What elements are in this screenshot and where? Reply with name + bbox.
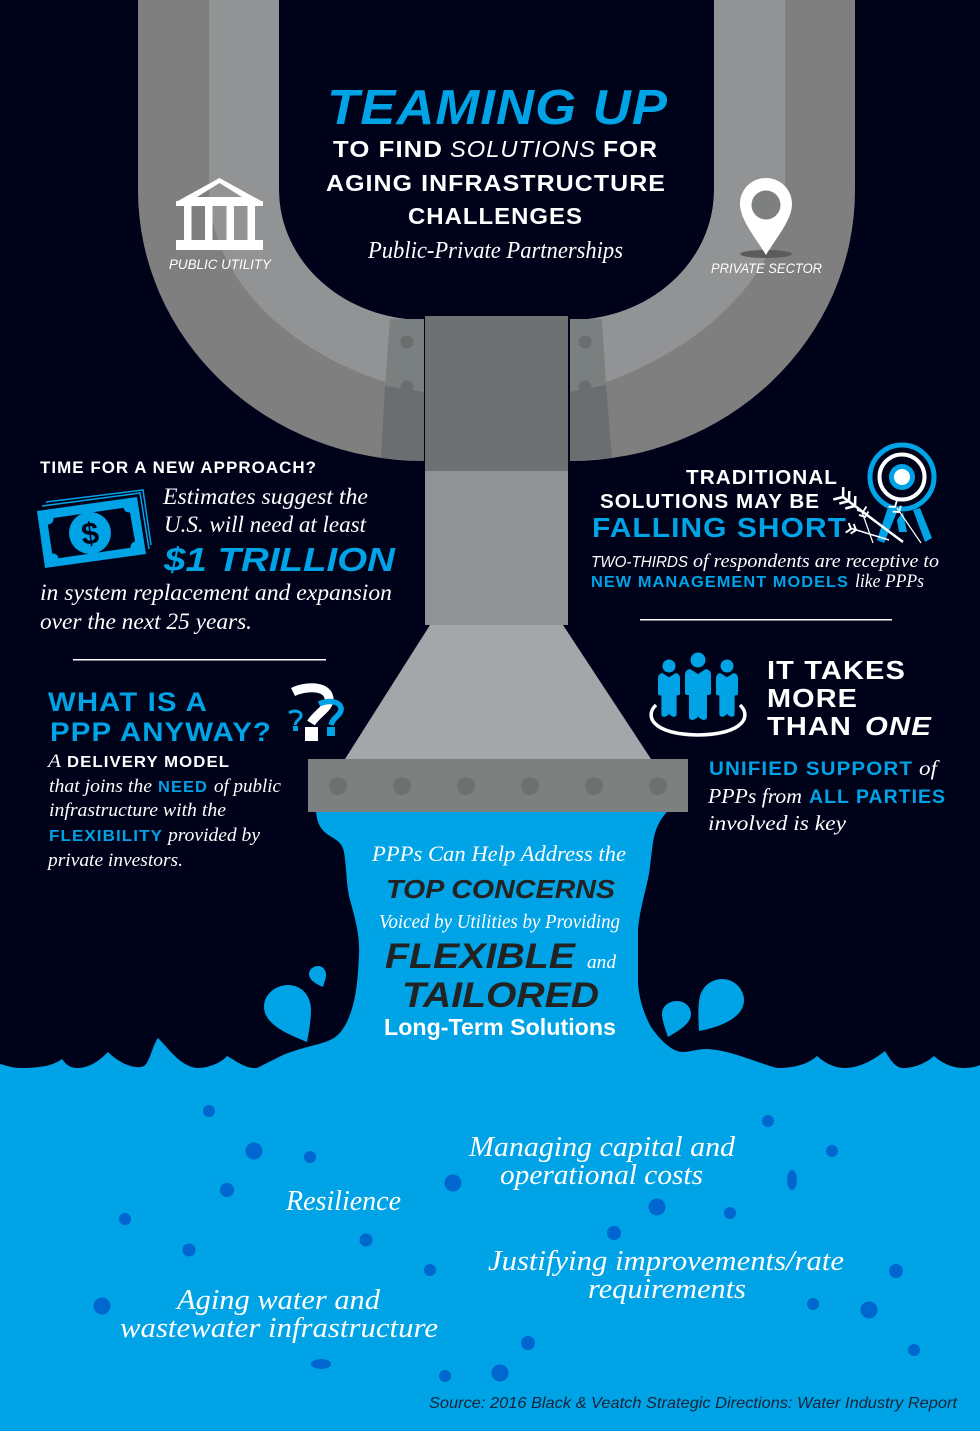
heading: it takes more than one: ONE: [865, 711, 932, 741]
right pipe collar: [570, 319, 612, 461]
body text: two-thirds of respondents: of respondents are receptive to: [693, 552, 939, 572]
icon: three people in a ring: [651, 652, 745, 735]
heading: it takes more than one: [767, 655, 932, 741]
heading: time for a new approach: TIME FOR A NEW APPROACH?: [40, 459, 317, 477]
junction lower section: [425, 471, 568, 625]
icon: question marks: [289, 688, 341, 741]
callout: top concerns on the water stream: Voiced by Utilities by Providing: [379, 912, 620, 933]
heading: what is a ppp anyway: WHAT IS A: [48, 687, 208, 717]
body text: system replacement: [40, 580, 392, 634]
callout: top concerns on the water stream: TOP CONCERNS: [386, 874, 616, 904]
stat: $1 trillion: $1 TRILLION: [163, 541, 396, 578]
concern: aging infrastructure: wastewater infrastructure: [120, 1313, 438, 1344]
junction upper section: [425, 316, 568, 471]
callout: top concerns on the water stream: FLEXIBLE: [385, 937, 577, 976]
left pipe collar: [381, 319, 424, 461]
concern: aging infrastructure: [120, 1285, 438, 1344]
heading: what is a ppp anyway: [48, 687, 272, 747]
body text: delivery model definition: that joins the: [49, 776, 152, 797]
body text: system replacement: over the next 25 years.: [40, 609, 252, 634]
concern: aging infrastructure: Aging water and: [175, 1285, 381, 1316]
concern: justifying improvements: Justifying improvements/rate: [488, 1246, 844, 1277]
body text: delivery model definition: private investors.: [46, 850, 183, 871]
concern: justifying improvements: requirements: [588, 1274, 746, 1305]
icon: stack of dollar bills: $: [79, 515, 101, 552]
body text: delivery model definition: infrastructure with the: [49, 800, 226, 821]
body text: estimates: [162, 484, 368, 537]
left pipe outer band: [138, 0, 424, 461]
body text: delivery model definition: of public: [214, 776, 282, 797]
subtitle line 1: TO FIND: [333, 136, 443, 162]
body text: delivery model definition: [46, 751, 282, 871]
callout: top concerns on the water stream: TAILORED: [402, 976, 599, 1015]
body text: two-thirds of respondents: [591, 552, 939, 592]
heading: traditional solutions may be: [600, 467, 838, 513]
label: private sector: PRIVATE SECTOR: [711, 261, 822, 276]
source note: Source: 2016 Black & Veatch Strategic Directions: Water Industry Report: [429, 1395, 958, 1412]
body text: unified support: involved is key: [708, 811, 847, 835]
body text: estimates: Estimates suggest the: [162, 484, 368, 509]
body text: unified support: [707, 756, 946, 835]
body text: two-thirds of respondents: TWO-THIRDS: [591, 554, 688, 571]
callout: top concerns on the water stream: and: [587, 952, 617, 973]
concern: justifying improvements: [488, 1246, 844, 1305]
body text: system replacement: in system replacement and expansion: [40, 580, 392, 605]
callout: top concerns on the water stream: [371, 841, 626, 1040]
title block: [326, 81, 668, 264]
body text: estimates: U.S. will need at least: [164, 512, 367, 537]
flange with bolts: [308, 759, 688, 812]
subtitle: public-private partnerships: Public-Private Partnerships: [367, 238, 623, 264]
body text: two-thirds of respondents: like PPPs: [855, 572, 924, 592]
right pipe highlight band: [570, 0, 785, 393]
subtitle line 3: CHALLENGES: [408, 203, 583, 229]
icon: public utility building: [176, 178, 263, 250]
water stream and pool: [0, 812, 980, 1431]
left pipe: [138, 0, 424, 461]
body text: delivery model definition: NEED: [158, 779, 208, 796]
heading: traditional solutions may be: SOLUTIONS MAY BE: [600, 491, 820, 513]
heading: falling short: FALLING SHORT: [592, 512, 847, 543]
body text: unified support: UNIFIED SUPPORT: [709, 759, 913, 780]
icon: private sector map pin: [740, 178, 792, 258]
icon: stack of dollar bills: [37, 490, 151, 568]
heading: it takes more than one: THAN: [767, 711, 852, 741]
icon: target with missed arrows: [833, 445, 934, 543]
nozzle funnel: [345, 625, 651, 759]
right pipe outer band: [570, 0, 855, 461]
panel: traditional solutions falling short: [591, 445, 939, 592]
subtitle line 1: [333, 136, 658, 162]
panel: it takes more than one: [651, 652, 946, 835]
concern: resilience: Resilience: [285, 1186, 401, 1217]
body text: delivery model definition: FLEXIBILITY: [49, 828, 163, 845]
subtitle line 1: FOR: [603, 136, 658, 162]
concern: managing costs: Managing capital and: [468, 1132, 736, 1163]
body text: unified support: ALL PARTIES: [809, 787, 946, 808]
concern: managing costs: [468, 1132, 736, 1191]
right pipe: [570, 0, 855, 461]
body text: two-thirds of respondents: NEW MANAGEMENT MODELS: [591, 574, 849, 591]
left pipe highlight band: [209, 0, 424, 393]
body text: unified support: PPPs from: [707, 784, 802, 808]
icon: water droplets: [264, 966, 744, 1042]
subtitle line 2: AGING INFRASTRUCTURE: [326, 170, 666, 196]
heading: it takes more than one: MORE: [767, 683, 858, 713]
body text: unified support: of: [919, 756, 940, 780]
label: public utility: PUBLIC UTILITY: [169, 257, 272, 272]
body text: delivery model definition: A: [46, 751, 61, 772]
body text: delivery model definition: DELIVERY MODEL: [67, 754, 230, 771]
central pipe junction: [308, 316, 688, 812]
concern: managing costs: operational costs: [500, 1160, 703, 1191]
panel: time for a new approach: [37, 459, 396, 634]
heading: what is a ppp anyway: PPP ANYWAY?: [50, 717, 272, 747]
heading: it takes more than one: IT TAKES: [767, 655, 906, 685]
callout: top concerns on the water stream: Long-Term Solutions: [384, 1014, 616, 1040]
heading: traditional solutions may be: TRADITIONAL: [686, 467, 838, 489]
subtitle line 1: SOLUTIONS: [450, 136, 596, 162]
title: teaming up: TEAMING UP: [327, 81, 668, 135]
body text: delivery model definition: provided by: [166, 825, 261, 846]
panel: what is a ppp: [46, 687, 341, 871]
bubbles in the water: [94, 1105, 920, 1382]
callout: top concerns on the water stream: PPPs Can Help Address the: [371, 841, 626, 866]
